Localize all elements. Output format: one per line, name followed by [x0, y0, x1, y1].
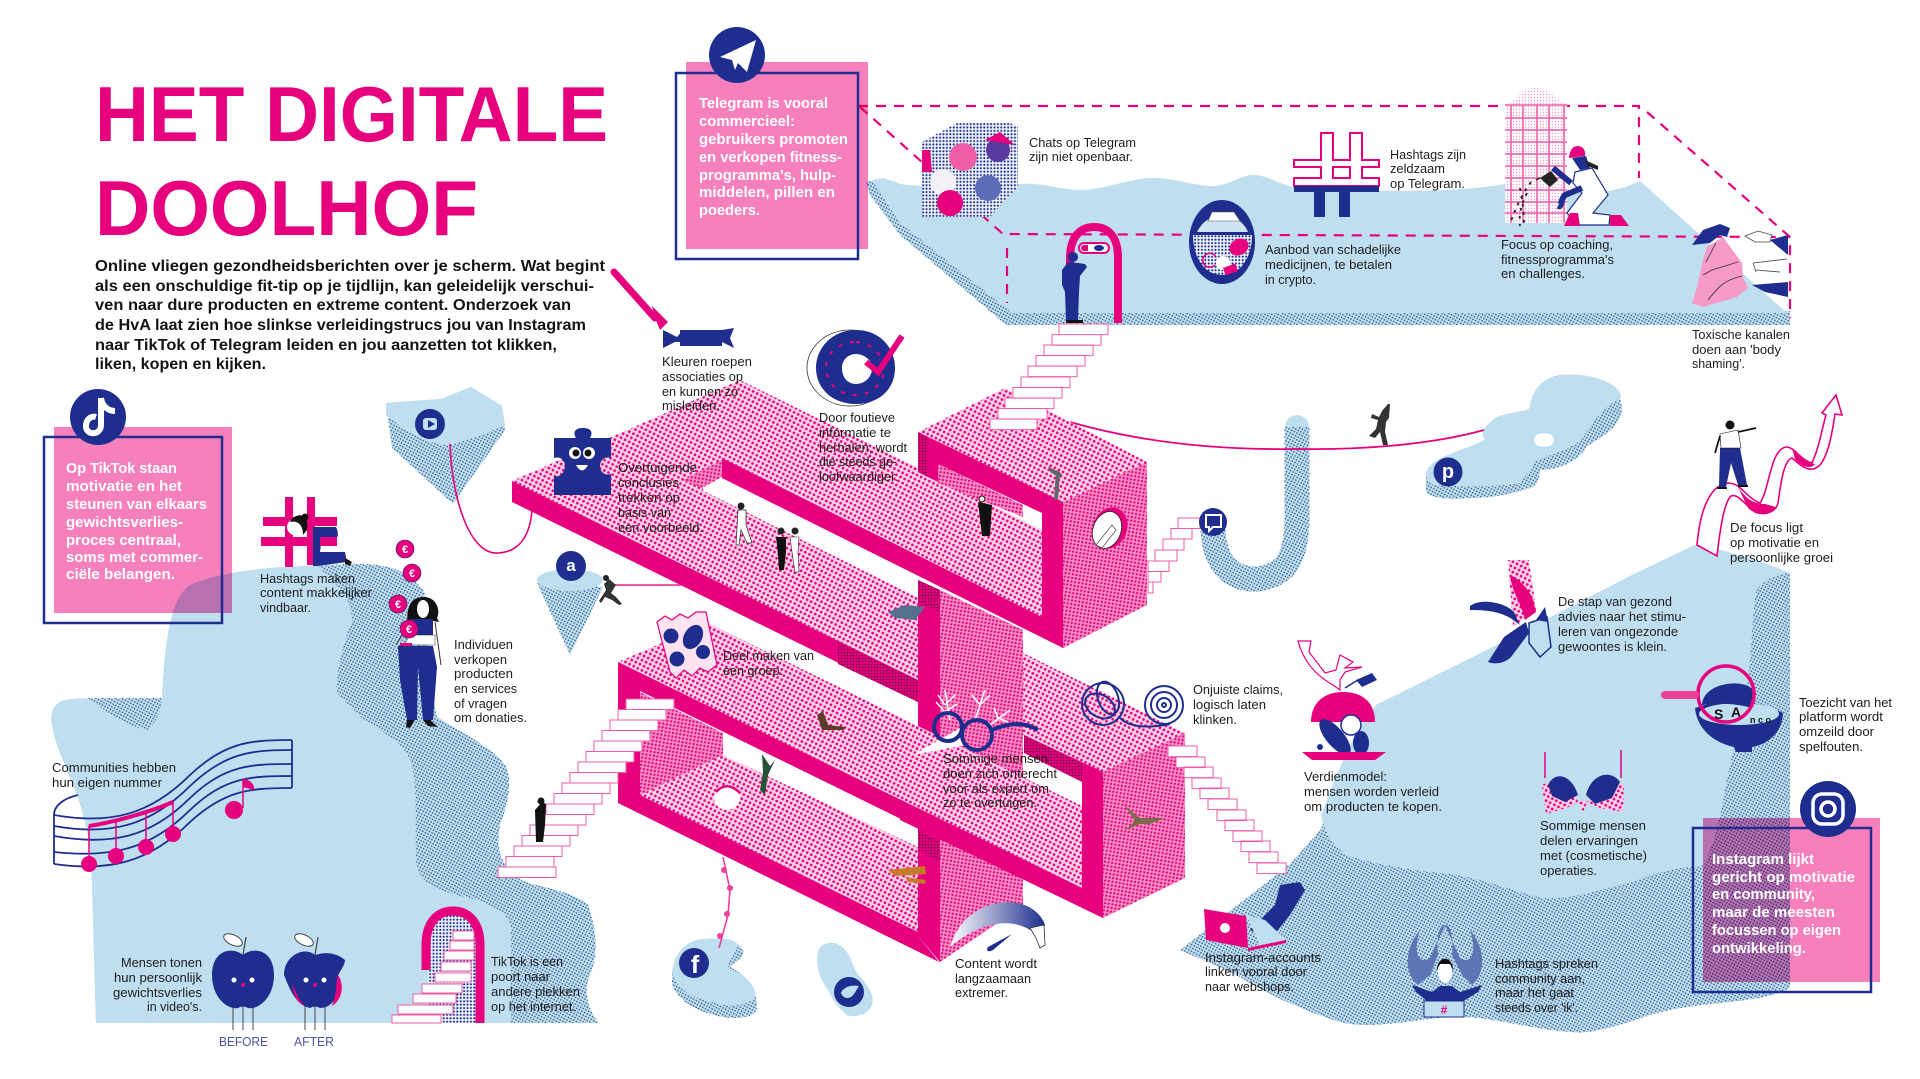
icon: paper plane: [720, 40, 756, 72]
dashed outline: Telegram zone: [858, 106, 1790, 318]
caption: fake experts: Sommige mensen: [943, 752, 1048, 766]
icon: Telegram hashtag: [1294, 133, 1379, 217]
figure: person with hashtag laptop: [1408, 925, 1482, 1017]
caption: communities song: Communities hebben: [52, 761, 176, 775]
caption: medicines: [1265, 243, 1401, 287]
icon: open mouth with pills: [1189, 200, 1255, 284]
intro text: de HvA laat zien hoe slinkse verleidingstrucs jou van Instagram: [95, 317, 586, 334]
caption: hashtags findable: Hashtags maken: [260, 572, 355, 586]
caption: wrong claims: logisch laten: [1193, 698, 1266, 712]
panel: Instagram: Instagram lijkt: [1712, 851, 1814, 868]
icon: growth arrow with standing man: [1697, 395, 1842, 556]
caption: repeated misinformation: informatie te: [819, 426, 891, 440]
figure: woman with coins: €: [409, 568, 415, 580]
caption: conclusions: trekken op: [618, 491, 680, 505]
intro text: ven naar dure producten en extreme content. Onderzoek van: [95, 297, 571, 314]
panel: TikTok: Op TikTok staan: [66, 460, 177, 477]
figures: people on upper plate: [736, 466, 1062, 620]
caption: belonging: Deel maken van: [723, 649, 814, 663]
intro text: Online vliegen gezondheidsberichten over je scherm. Wat begint: [95, 258, 606, 275]
caption: content extremer: extremer.: [955, 986, 1008, 1000]
maze: lower right block: [1023, 653, 1185, 918]
icon: meteor arc: [950, 902, 1045, 951]
caption: TikTok gateway: andere plekken: [491, 985, 580, 999]
figure: woman with coins: €: [402, 544, 408, 556]
icon: glasses and carrot: [913, 690, 1038, 755]
caption: personal growth: op motivatie en: [1730, 536, 1819, 550]
caption: personal growth: De focus ligt: [1730, 521, 1804, 535]
figure: before apple: [212, 931, 274, 1030]
figure: tightrope walker: [1369, 404, 1390, 445]
caption: repeated misinformation: Door foutieve: [819, 411, 895, 425]
caption: colours: misleiden.: [662, 399, 720, 413]
island: YouTube: [386, 387, 505, 504]
caption: step to unhealthy habits: leren van ongezonde: [1558, 625, 1678, 639]
icon: bowl with magnifier and letter soup: [1661, 666, 1783, 752]
caption: cosmetic operations: met (cosmetische): [1540, 849, 1647, 863]
icon: door on TikTok island: [392, 911, 480, 1023]
caption: hashtags on Telegram: zeldzaam: [1390, 162, 1445, 176]
panel: TikTok: [44, 389, 232, 623]
caption: weight loss videos: in video's.: [147, 1000, 202, 1014]
island: Pinterest: p: [1442, 461, 1454, 483]
figure: woman with coins: €: [395, 599, 401, 611]
caption: hashtags findable: [260, 572, 372, 615]
icon: bowl with magnifier and letter soup: A: [1731, 704, 1741, 720]
caption: belonging: een groep.: [723, 664, 783, 678]
figure: woman with coins: [389, 540, 441, 728]
caption: fake experts: [943, 752, 1058, 810]
caption: webshops: [1205, 951, 1321, 994]
icon: laptop with legs: [1204, 882, 1305, 951]
caption: fake experts: voor als expert om: [943, 782, 1049, 796]
caption: coaching: en challenges.: [1501, 267, 1585, 281]
caption: TikTok gateway: [491, 955, 580, 1014]
icon: tiled wall: [1505, 87, 1567, 223]
icon: Telegram door with guard: [1062, 227, 1118, 323]
caption: colours: Kleuren roepen: [662, 355, 752, 369]
caption: individuals sell: of vragen: [454, 697, 507, 711]
caption: moderation: Toezicht van het: [1799, 696, 1893, 710]
caption: hashtags community: [1495, 957, 1598, 1015]
caption: step to unhealthy habits: De stap van gezond: [1558, 595, 1672, 609]
panel: Telegram: middelen, pillen en: [699, 184, 835, 201]
island: Telegram landscape: [866, 175, 1790, 325]
caption: TikTok gateway: TikTok is een: [491, 955, 563, 969]
island: OnlyFans: [817, 943, 873, 1016]
icon: bowl with magnifier and letter soup: n c o: [1750, 715, 1772, 725]
caption: repeated misinformation: herhalen, wordt: [819, 441, 908, 455]
caption: fake experts: zo te overtuigen.: [943, 796, 1037, 810]
connector: YouTube line: [450, 444, 532, 553]
caption: webshops: Instagram-accounts: [1205, 951, 1321, 965]
caption: hashtags on Telegram: [1390, 148, 1466, 191]
caption: revenue model: om producten te kopen.: [1304, 800, 1442, 814]
caption: TikTok gateway: op het internet.: [491, 1000, 576, 1014]
icon: bowl with magnifier and letter soup: S: [1714, 706, 1723, 722]
caption: webshops: naar webshops.: [1205, 980, 1294, 994]
caption: coaching: fitnessprogramma's: [1501, 253, 1614, 267]
caption: step to unhealthy habits: gewoontes is klein.: [1558, 640, 1667, 654]
caption: body shaming: shaming'.: [1692, 357, 1745, 371]
caption: wrong claims: Onjuiste claims,: [1193, 683, 1283, 697]
island: Pinterest: [1426, 375, 1622, 499]
panel: Telegram: [676, 27, 868, 259]
island: J tube with Twitch: [1213, 415, 1309, 579]
caption: content extremer: langzaamaan: [955, 972, 1031, 986]
caption: moderation: spelfouten.: [1799, 740, 1863, 754]
panel: TikTok: ciële belangen.: [66, 566, 175, 583]
panel: Telegram: programma's, hulp-: [699, 167, 836, 184]
caption: content extremer: Content wordt: [955, 957, 1038, 971]
icon: music staff with notes: [54, 740, 292, 872]
caption: webshops: linken vooral door: [1205, 965, 1307, 979]
panel: Telegram: gebruikers promoten: [699, 131, 848, 148]
intro text: als een onschuldige fit-tip op je tijdlijn, kan geleidelijk verschui-: [95, 278, 594, 295]
icon: donut with checkmark: [807, 330, 902, 406]
icon: cloche with pills: [1298, 641, 1386, 760]
caption: moderation: omzeild door: [1799, 725, 1874, 739]
caption: body shaming: doen aan 'body: [1692, 343, 1782, 357]
caption: hashtags on Telegram: Hashtags zijn: [1390, 148, 1466, 162]
caption: wrong claims: [1193, 683, 1283, 727]
caption: communities song: hun eigen nummer: [52, 776, 162, 790]
caption: medicines: in crypto.: [1265, 273, 1316, 287]
panel: Telegram: poeders.: [699, 202, 760, 219]
label: after: AFTER: [294, 1034, 334, 1049]
caption: body shaming: [1692, 328, 1790, 371]
intro text: naar TikTok of Telegram leiden en jou aanzetten tot klikken,: [95, 337, 557, 354]
caption: repeated misinformation: die steeds ge-: [819, 455, 897, 469]
maze: lower right frame: [900, 735, 1103, 918]
caption: revenue model: [1304, 770, 1442, 814]
caption: individuals sell: [454, 638, 527, 725]
caption: cosmetic operations: [1540, 819, 1647, 878]
caption: cosmetic operations: delen ervaringen: [1540, 834, 1638, 848]
maze: lower plate: [618, 623, 1103, 962]
caption: step to unhealthy habits: advies naar het stimu-: [1558, 610, 1686, 624]
intro text: [95, 258, 606, 373]
rope: [1070, 422, 1484, 449]
figure: person with hashtag laptop: #: [1441, 1003, 1448, 1017]
island: Facebook: f: [691, 951, 700, 979]
caption: hashtags findable: content makkelijker: [260, 586, 372, 600]
stairs: to Telegram door: [990, 324, 1108, 430]
panel: TikTok: motivatie en het: [66, 478, 182, 495]
caption: colours: associaties op: [662, 370, 743, 384]
caption: conclusions: [618, 461, 703, 535]
figures: people on lower plate: [535, 711, 1165, 884]
panel: Instagram: gericht op motivatie: [1712, 869, 1855, 886]
figure: after apple: [284, 931, 345, 1030]
caption: hashtags on Telegram: op Telegram.: [1390, 177, 1465, 191]
icon: Twitch circle: [1199, 508, 1227, 536]
caption: personal growth: persoonlijke groei: [1730, 551, 1833, 565]
caption: coaching: Focus op coaching,: [1501, 238, 1613, 252]
icon: Instagram camera: [1813, 794, 1843, 824]
caption: weight loss videos: [113, 956, 203, 1014]
icon: blue dots sticker: [657, 612, 717, 678]
island: TikTok landscape: [51, 564, 598, 1023]
caption: repeated misinformation: loofwaardiger.: [819, 470, 898, 484]
caption: wrong claims: klinken.: [1193, 713, 1237, 727]
caption: individuals sell: en services: [454, 682, 517, 696]
caption: hashtags community: maar het gaat: [1495, 986, 1574, 1000]
caption: individuals sell: producten: [454, 667, 513, 681]
island: Facebook: [672, 939, 757, 1018]
caption: chats: [1029, 136, 1136, 164]
caption: hashtags community: steeds over 'ik'.: [1495, 1001, 1578, 1015]
title: [95, 70, 608, 252]
maze: upper plate: [512, 380, 1042, 702]
caption: conclusions: basis van: [618, 506, 671, 520]
caption: TikTok gateway: poort naar: [491, 970, 550, 984]
caption: conclusions: conclusies: [618, 476, 679, 490]
icon: paint brush and candy: [614, 272, 734, 348]
island: Amazon cone: [537, 551, 682, 655]
icon: puzzle piece: [554, 428, 611, 495]
caption: moderation: [1799, 696, 1893, 754]
panel: TikTok: soms met commer-: [66, 549, 203, 566]
intro text: liken, kopen en kijken.: [95, 356, 266, 373]
caption: chats: Chats op Telegram: [1029, 136, 1136, 150]
caption: colours: [662, 355, 752, 413]
panel: TikTok: steunen van elkaars: [66, 496, 207, 513]
stairs: right descent: [1168, 746, 1286, 874]
icon: banana with twisted core: [1470, 560, 1551, 663]
icon: yarn tangle and spiral: [1081, 679, 1183, 726]
panel: Instagram: ontwikkeling.: [1712, 940, 1806, 957]
caption: hashtags community: Hashtags spreken: [1495, 957, 1598, 971]
maze: top block: [722, 388, 1147, 648]
panel: TikTok: proces centraal,: [66, 532, 181, 549]
caption: revenue model: mensen worden verleid: [1304, 785, 1439, 799]
caption: hashtags findable: vindbaar.: [260, 601, 311, 615]
caption: fake experts: doen zich onterecht: [943, 767, 1058, 781]
figure: kneeling woman with watering can: [1510, 146, 1629, 226]
caption: medicines: Aanbod van schadelijke: [1265, 243, 1401, 257]
caption: content extremer: [955, 957, 1038, 1000]
caption: body shaming: Toxische kanalen: [1692, 328, 1790, 342]
caption: coaching: [1501, 238, 1614, 281]
caption: personal growth: [1730, 521, 1833, 565]
maze: central column: [918, 580, 1023, 962]
icon: bra with lettuce: [1542, 750, 1624, 814]
caption: step to unhealthy habits: [1558, 595, 1686, 654]
panel: Telegram: en verkopen fitness-: [699, 149, 842, 166]
caption: individuals sell: om donaties.: [454, 711, 527, 725]
panel: Instagram: en community,: [1712, 886, 1815, 903]
caption: medicines: medicijnen, te betalen: [1265, 258, 1392, 272]
panel: Instagram: focussen op eigen: [1712, 922, 1841, 939]
panel: Telegram: Telegram is vooral: [699, 95, 828, 112]
panel: Instagram: [1693, 781, 1880, 992]
caption: repeated misinformation: [819, 411, 908, 484]
icon: cube with bubbles: [922, 123, 1018, 217]
icon: TikTok note: [86, 398, 115, 433]
icon: TikTok hashtag with person: [261, 497, 352, 567]
panel: Telegram: commercieel:: [699, 113, 795, 130]
panel: TikTok: gewichtsverlies-: [66, 514, 183, 531]
caption: communities song: [52, 761, 176, 790]
panel: Instagram: maar de meesten: [1712, 904, 1835, 921]
island: Amazon cone: a: [566, 556, 576, 575]
title: DOOLHOF: [95, 164, 478, 252]
figure: woman with coins: €: [406, 624, 412, 636]
title: HET DIGITALE: [95, 70, 608, 158]
caption: colours: en kunnen zo: [662, 385, 738, 399]
caption: cosmetic operations: operaties.: [1540, 864, 1597, 878]
label: before: BEFORE: [219, 1034, 268, 1049]
connector: chain to Facebook: [717, 857, 733, 948]
caption: individuals sell: Individuen: [454, 638, 513, 652]
caption: conclusions: een voorbeeld.: [618, 521, 703, 535]
caption: weight loss videos: gewichtsverlies: [113, 986, 202, 1000]
caption: weight loss videos: hun persoonlijk: [114, 971, 203, 985]
stairs: lower left: [498, 699, 674, 878]
caption: belonging: [723, 649, 814, 678]
figure: seated nude woman and pointing hands: [1692, 224, 1788, 307]
caption: conclusions: Overtuigende: [618, 461, 697, 475]
caption: chats: zijn niet openbaar.: [1029, 150, 1133, 164]
caption: weight loss videos: Mensen tonen: [121, 956, 202, 970]
caption: moderation: platform wordt: [1799, 710, 1884, 724]
stairs: to Twitch: [1148, 518, 1200, 593]
caption: hashtags community: community aan,: [1495, 972, 1585, 986]
island: Instagram landscape: [1180, 545, 1790, 1033]
caption: individuals sell: verkopen: [454, 653, 507, 667]
caption: revenue model: Verdienmodel:: [1304, 770, 1387, 784]
caption: cosmetic operations: Sommige mensen: [1540, 819, 1646, 833]
